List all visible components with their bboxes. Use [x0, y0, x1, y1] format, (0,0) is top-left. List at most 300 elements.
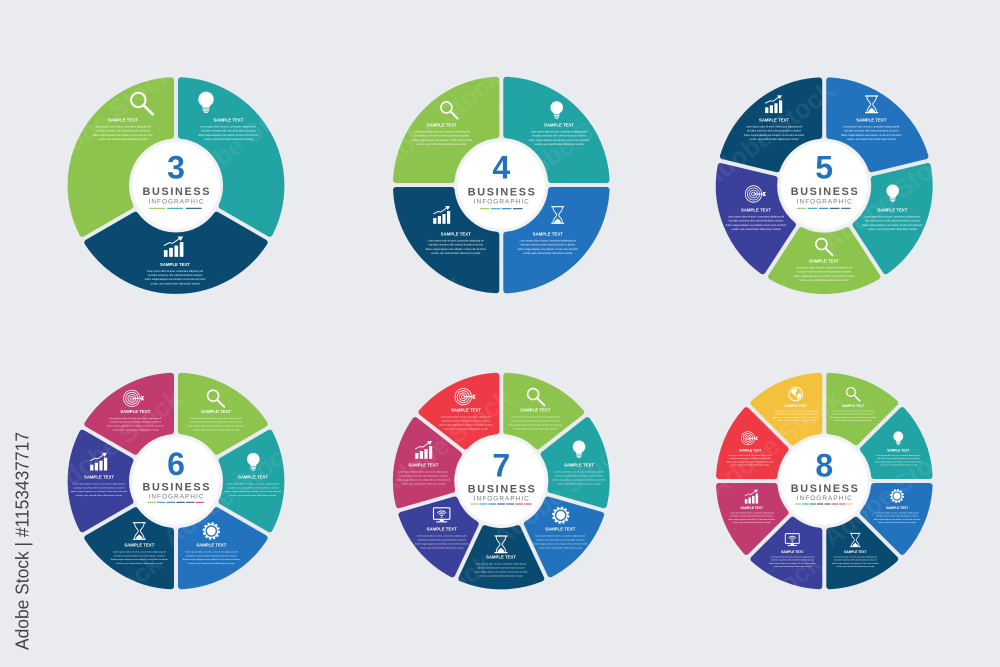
text block: navy: SAMPLE TEXT — [844, 550, 867, 554]
icon: growth chart — [765, 95, 782, 113]
icon: gear — [204, 523, 219, 539]
segment: teal — [222, 433, 282, 529]
text block: green: Lorem ipsum dolor sit amet, consectetur adipiscing elit — [796, 266, 852, 270]
text block: blue — [183, 542, 240, 565]
text block: indigo: veniam, quis nostrud tation ullamcorper suscipit — [731, 228, 781, 231]
text block: navy: dolore magna aliquam erat volutpat. Ut wisi enim ad minim — [744, 134, 804, 137]
wedge: pink — [81, 366, 195, 466]
text block: navy: sed diam nonummy nibh euismod tincidunt ut laoreet — [114, 554, 165, 557]
text block: blue — [874, 506, 921, 524]
hub: 7 — [455, 434, 548, 528]
text block: indigo: SAMPLE TEXT — [427, 526, 457, 532]
icon: light bulb — [550, 101, 563, 119]
text block: navy: SAMPLE TEXT — [486, 554, 516, 560]
text block: green: SAMPLE TEXT — [201, 409, 231, 414]
text block: pink: sed diam nonummy nibh euismod tincidunt ut laoreet — [399, 474, 448, 478]
wedge: teal — [157, 56, 312, 248]
wedge: blue — [512, 482, 607, 579]
colour dashes — [149, 208, 202, 209]
text block: navy: SAMPLE TEXT — [759, 118, 789, 122]
text block: teal: Lorem ipsum dolor sit amet, consectetur adipiscing elit — [864, 216, 921, 218]
segment: teal — [855, 408, 935, 496]
text block: green: dolore magna aliquam erat volutpat. Ut wisi enim ad minim — [830, 416, 877, 419]
text block: teal: veniam, quis nostrud tation ullamcorper suscipit — [868, 228, 917, 231]
text block: teal: sed diam nonummy nibh euismod tincidunt ut laoreet — [555, 474, 604, 478]
text block: pink — [728, 506, 776, 524]
text block: teal: sed diam nonummy nibh euismod tincidunt ut laoreet — [532, 135, 587, 138]
icon: target — [455, 388, 476, 405]
icon: gear — [891, 490, 903, 502]
text block: green: SAMPLE TEXT — [520, 408, 551, 412]
text block: indigo: Lorem ipsum dolor sit amet, consectetur adipiscing elit — [73, 482, 126, 486]
text block: green: sed diam nonummy nibh euismod tincidunt ut laoreet — [832, 413, 875, 416]
icon: globe — [789, 387, 802, 401]
wedge: red — [713, 408, 794, 496]
text block: navy: veniam, quis nostrud tation ullamcorper suscipit — [150, 282, 200, 285]
text block: indigo: Lorem ipsum dolor sit amet, consectetur adipiscing elit — [728, 216, 784, 218]
text block: red: dolore magna aliquam erat volutpat. Ut wisi enim ad minim — [727, 460, 774, 463]
text block: indigo: Lorem ipsum dolor sit amet, consectetur adipiscing elit — [771, 556, 814, 558]
heading: business: BUSINESS — [468, 186, 535, 198]
panel: 7 step circle — [390, 368, 613, 586]
text block: indigo: Lorem ipsum dolor sit amet, consectetur adipiscing elit — [417, 534, 467, 538]
text block: teal: Lorem ipsum dolor sit amet, consectetur adipiscing elit — [200, 126, 257, 128]
segment: blue — [479, 162, 626, 310]
number 4: 4 — [492, 149, 510, 185]
text block: teal: dolore magna aliquam erat volutpat. Ut wisi enim ad minim — [552, 478, 606, 482]
segment: green — [377, 60, 524, 208]
icon: light bulb — [247, 453, 260, 470]
watermark pattern: Adobe Stock — [207, 233, 352, 353]
icon: target — [745, 186, 766, 202]
segment: navy — [810, 512, 898, 592]
icon: hourglass — [133, 523, 146, 539]
text block: blue: veniam, quis nostrud tation ullamcorper suscipit — [539, 546, 582, 550]
wedge: teal — [539, 418, 613, 515]
segment: green — [810, 370, 898, 450]
heading: business: BUSINESS — [142, 482, 210, 494]
text block: indigo: sed diam nonummy nibh euismod tincidunt ut laoreet — [729, 220, 784, 223]
subheading: infographic: INFOGRAPHIC — [797, 495, 852, 502]
wedge: navy — [81, 496, 195, 596]
watermark pattern: Adobe Stock — [695, 75, 840, 195]
text block: green: sed diam nonummy nibh euismod tincidunt ut laoreet — [95, 130, 150, 133]
text block: navy: sed diam nonummy nibh euismod tincidunt ut laoreet — [428, 244, 483, 247]
icon: monitor with wifi — [785, 534, 799, 546]
text block: navy: Lorem ipsum dolor sit amet, consectetur adipiscing elit — [428, 240, 484, 242]
text block: navy: veniam, quis nostrud tation ullamcorper suscipit — [431, 252, 481, 255]
wedge: teal — [222, 433, 281, 529]
watermark pattern: Adobe Stock — [42, 383, 187, 503]
watermark pattern: Adobe Stock — [547, 545, 692, 665]
text block: indigo: veniam, quis nostrud tation ullamcorper suscipit — [773, 565, 812, 568]
text block: teal: veniam, quis nostrud tation ullamcorper suscipit — [204, 138, 253, 141]
subheading: infographic: INFOGRAPHIC — [148, 494, 204, 501]
text block: green: SAMPLE TEXT — [809, 258, 839, 264]
text block: teal: dolore magna aliquam erat volutpat. Ut wisi enim ad minim — [875, 460, 922, 463]
watermark pattern: Adobe Stock — [167, 83, 312, 203]
text block: blue: Lorem ipsum dolor sit amet, consectetur adipiscing elit — [535, 534, 586, 538]
icon: growth chart — [164, 236, 183, 257]
wedge: indigo — [751, 512, 839, 592]
icon: hourglass — [494, 536, 508, 553]
watermark pattern: Adobe Stock — [487, 433, 632, 553]
wedge: blue — [479, 162, 626, 310]
text block: navy: Lorem ipsum dolor sit amet, consectetur adipiscing elit — [113, 550, 166, 554]
text block: yellow: SAMPLE TEXT — [785, 404, 807, 408]
text block: green: sed diam nonummy nibh euismod tincidunt ut laoreet — [190, 421, 242, 424]
text block: blue: dolore magna aliquam erat volutpat. Ut wisi enim ad minim — [874, 518, 921, 521]
text block: teal — [225, 474, 282, 497]
text block: indigo: veniam, quis nostrud tation ullamcorper suscipit — [76, 494, 122, 497]
watermark pattern: Adobe Stock — [22, 548, 167, 667]
text block: blue — [534, 526, 587, 550]
wedge: indigo — [705, 149, 805, 277]
icon: target — [124, 390, 144, 406]
text block: blue: dolore magna aliquam erat volutpat. Ut wisi enim ad minim — [517, 248, 578, 251]
text block: green: veniam, quis nostrud tation ullamcorper suscipit — [98, 138, 148, 141]
segment: navy — [377, 162, 524, 310]
watermark pattern: Adobe Stock — [372, 383, 517, 503]
text block: green: Lorem ipsum dolor sit amet, consectetur adipiscing elit — [831, 410, 875, 412]
wedge: red — [418, 368, 518, 457]
text block: green — [830, 404, 877, 422]
icon: magnifier — [528, 389, 544, 405]
wedge: teal — [479, 60, 626, 208]
text block: teal: sed diam nonummy nibh euismod tincidunt ut laoreet — [201, 130, 256, 133]
text block: teal: veniam, quis nostrud tation ullamcorper suscipit — [557, 482, 601, 486]
text block: green: Lorem ipsum dolor sit amet, consectetur adipiscing elit — [510, 416, 561, 418]
text block: blue: SAMPLE TEXT — [545, 526, 576, 532]
wedge: navy — [810, 512, 898, 592]
segment: teal — [157, 56, 312, 248]
text block: pink: SAMPLE TEXT — [120, 409, 151, 414]
text block: navy — [744, 118, 804, 141]
text block: teal: Lorem ipsum dolor sit amet, consectetur adipiscing elit — [877, 454, 920, 457]
icon: light bulb — [893, 431, 903, 445]
icon: growth chart — [90, 453, 107, 470]
text block: blue: dolore magna aliquam erat volutpat. Ut wisi enim ad minim — [534, 542, 587, 546]
text block: navy — [474, 554, 528, 578]
text block: teal: veniam, quis nostrud tation ullamcorper suscipit — [879, 464, 918, 466]
wedge: navy — [711, 65, 846, 191]
text block: red: SAMPLE TEXT — [739, 448, 761, 452]
text block: red: Lorem ipsum dolor sit amet, consectetur adipiscing elit — [728, 454, 772, 457]
text block: blue: sed diam nonummy nibh euismod tincidunt ut laoreet — [876, 515, 919, 518]
hub: 3 — [130, 139, 222, 232]
text block: green: dolore magna aliquam erat volutpat. Ut wisi enim ad minim — [92, 134, 153, 137]
text block: blue: SAMPLE TEXT — [856, 118, 887, 122]
text block: teal: sed diam nonummy nibh euismod tincidunt ut laoreet — [865, 220, 920, 223]
text block: blue: sed diam nonummy nibh euismod tincidunt ut laoreet — [520, 244, 575, 247]
segment: indigo — [396, 482, 491, 579]
text block: red: SAMPLE TEXT — [451, 408, 481, 412]
wedge: yellow — [751, 370, 839, 450]
text block: pink: dolore magna aliquam erat volutpat. Ut wisi enim ad minim — [397, 478, 450, 482]
segment: blue — [157, 496, 271, 596]
segment: indigo — [751, 512, 839, 592]
text block: blue: veniam, quis nostrud tation ullamcorper suscipit — [878, 521, 916, 524]
text block: blue: sed diam nonummy nibh euismod tincidunt ut laoreet — [536, 538, 585, 542]
hub: 6 — [130, 434, 222, 528]
text block: yellow — [772, 404, 820, 422]
text block: teal: Lorem ipsum dolor sit amet, consectetur adipiscing elit — [554, 470, 604, 474]
icon: magnifier — [847, 388, 860, 401]
text block: navy — [832, 550, 879, 568]
text block: blue: dolore magna aliquam erat volutpat. Ut wisi enim ad minim — [841, 134, 902, 137]
text block: teal: veniam, quis nostrud tation ullamcorper suscipit — [230, 494, 276, 497]
text block: navy: sed diam nonummy nibh euismod tincidunt ut laoreet — [834, 559, 877, 562]
icon: growth chart — [745, 490, 758, 504]
text block: indigo — [726, 208, 786, 231]
icon: hourglass — [850, 533, 860, 547]
segment: blue — [855, 466, 935, 554]
text block: teal: veniam, quis nostrud tation ullamcorper suscipit — [534, 143, 584, 146]
text block: teal: SAMPLE TEXT — [238, 474, 268, 480]
text block: indigo: dolore magna aliquam erat volutpat. Ut wisi enim ad minim — [415, 542, 469, 546]
text block: indigo — [71, 474, 128, 497]
segment: green — [484, 368, 585, 457]
text block: blue: veniam, quis nostrud tation ullamcorper suscipit — [188, 562, 235, 565]
watermark pattern: Adobe Stock — [322, 268, 467, 388]
text block: navy: SAMPLE TEXT — [160, 262, 190, 267]
text block: red — [439, 408, 493, 430]
text block: teal — [862, 208, 923, 231]
heading: business: BUSINESS — [142, 186, 210, 198]
colour dashes — [480, 208, 522, 209]
watermark pattern: Adobe Stock — [702, 383, 847, 503]
text block: teal: dolore magna aliquam erat volutpat. Ut wisi enim ad minim — [225, 490, 282, 493]
text block: navy: dolore magna aliquam erat volutpat. Ut wisi enim ad minim — [425, 248, 486, 251]
text block: blue: veniam, quis nostrud tation ullamcorper suscipit — [523, 252, 573, 255]
text block: blue: Lorem ipsum dolor sit amet, consectetur adipiscing elit — [875, 512, 919, 514]
text block: navy: Lorem ipsum dolor sit amet, consectetur adipiscing elit — [834, 556, 877, 558]
text block: indigo: dolore magna aliquam erat volutpat. Ut wisi enim ad minim — [71, 490, 128, 493]
wedge: indigo — [396, 482, 491, 579]
text block: blue: sed diam nonummy nibh euismod tincidunt ut laoreet — [844, 130, 899, 133]
text block: navy: veniam, quis nostrud tation ullamcorper suscipit — [749, 138, 799, 141]
text block: indigo: SAMPLE TEXT — [741, 208, 771, 212]
wedge: pink — [390, 418, 464, 515]
text block: green: dolore magna aliquam erat volutpat. Ut wisi enim ad minim — [411, 139, 472, 142]
subheading: infographic: INFOGRAPHIC — [148, 198, 204, 206]
text block: blue — [517, 232, 578, 255]
panel: 6 step circle — [71, 366, 282, 596]
hub: 8 — [778, 434, 871, 528]
colour dashes — [147, 502, 204, 503]
colour dashes — [797, 208, 851, 209]
text block: navy: sed diam nonummy nibh euismod tincidunt ut laoreet — [747, 130, 802, 133]
watermark pattern: Adobe Stock — [32, 58, 177, 178]
text block: green — [411, 122, 472, 146]
panel: 4 step circle — [377, 60, 626, 310]
text block: teal — [875, 448, 922, 466]
text block: indigo: dolore magna aliquam erat volutpat. Ut wisi enim ad minim — [726, 224, 786, 227]
text block: teal: Lorem ipsum dolor sit amet, consectetur adipiscing elit — [227, 482, 280, 486]
text block: teal: SAMPLE TEXT — [564, 462, 594, 468]
wedge: green — [810, 370, 898, 450]
text block: pink: veniam, quis nostrud tation ullamcorper suscipit — [402, 482, 445, 486]
segment: pink — [713, 466, 794, 554]
text block: green: veniam, quis nostrud tation ullamcorper suscipit — [193, 428, 239, 431]
icon: hourglass — [865, 96, 878, 113]
text block: pink: dolore magna aliquam erat volutpat. Ut wisi enim ad minim — [728, 518, 776, 521]
text block: blue: Lorem ipsum dolor sit amet, consectetur adipiscing elit — [520, 240, 576, 242]
watermark pattern: Adobe Stock — [817, 138, 962, 258]
text block: green: Lorem ipsum dolor sit amet, consectetur adipiscing elit — [414, 130, 470, 134]
segment: pink — [390, 418, 464, 515]
wedge: indigo — [71, 433, 130, 529]
icon: growth chart — [433, 206, 450, 224]
colour dashes — [471, 504, 532, 505]
segment: teal — [479, 60, 626, 208]
segment: blue — [512, 482, 607, 579]
panel: 3 step circle — [40, 56, 312, 291]
text block: red: veniam, quis nostrud tation ullamcorper suscipit — [731, 464, 769, 466]
text block: red: dolore magna aliquam erat volutpat. Ut wisi enim ad minim — [439, 424, 493, 426]
text block: indigo — [769, 550, 816, 568]
text block: navy: veniam, quis nostrud tation ullamcorper suscipit — [116, 562, 163, 565]
segment: indigo — [71, 433, 130, 529]
watermark pattern: Adobe Stock — [157, 433, 302, 553]
text block: green: dolore magna aliquam erat volutpat. Ut wisi enim ad minim — [794, 275, 854, 278]
number 6: 6 — [167, 446, 185, 482]
segment: navy — [461, 528, 541, 586]
text block: blue: SAMPLE TEXT — [886, 506, 908, 510]
text block: indigo: sed diam nonummy nibh euismod tincidunt ut laoreet — [771, 559, 814, 562]
text block: navy: dolore magna aliquam erat volutpat. Ut wisi enim ad minim — [474, 570, 528, 574]
segment: pink — [81, 366, 195, 466]
text block: red — [727, 448, 774, 466]
text block: red: Lorem ipsum dolor sit amet, consectetur adipiscing elit — [441, 416, 491, 418]
text block: green: SAMPLE TEXT — [108, 118, 138, 122]
wedge: navy — [377, 162, 524, 310]
text block: green: Lorem ipsum dolor sit amet, consectetur adipiscing elit — [95, 126, 151, 128]
text block: indigo: dolore magna aliquam erat volutpat. Ut wisi enim ad minim — [769, 562, 816, 565]
colour dashes — [795, 504, 853, 505]
text block: navy: veniam, quis nostrud tation ullamcorper suscipit — [836, 565, 875, 568]
text block: green — [509, 408, 562, 430]
text block: teal: dolore magna aliquam erat volutpat. Ut wisi enim ad minim — [529, 139, 589, 142]
segment: teal — [844, 149, 943, 277]
segment: green — [40, 56, 195, 248]
panel: 8 step circle — [713, 370, 935, 592]
icon: light bulb — [886, 184, 899, 202]
wedge: blue — [157, 496, 271, 596]
text block: teal — [529, 122, 589, 146]
wedge: green — [771, 230, 877, 291]
text block: blue — [841, 118, 902, 141]
wedge: blue — [855, 466, 935, 554]
segment: red — [713, 408, 794, 496]
heading: business: BUSINESS — [791, 483, 858, 495]
text block: blue: sed diam nonummy nibh euismod tincidunt ut laoreet — [186, 554, 237, 557]
text block: teal — [552, 462, 606, 486]
segment: navy — [81, 496, 195, 596]
text block: navy: SAMPLE TEXT — [124, 542, 155, 548]
segment: navy — [711, 65, 846, 191]
text block: green: dolore magna aliquam erat volutpat. Ut wisi enim ad minim — [509, 424, 562, 426]
text block: pink: Lorem ipsum dolor sit amet, consectetur adipiscing elit — [109, 417, 162, 420]
segment: teal — [539, 418, 613, 515]
text block: yellow: Lorem ipsum dolor sit amet, consectetur adipiscing elit — [774, 410, 818, 412]
text block: navy — [111, 542, 168, 565]
segment: yellow — [751, 370, 839, 450]
text block: indigo: SAMPLE TEXT — [781, 550, 804, 554]
segment: green — [157, 366, 271, 466]
watermark pattern: Adobe Stock — [532, 233, 677, 353]
text block: green: sed diam nonummy nibh euismod tincidunt ut laoreet — [511, 420, 560, 422]
icon: magnifier — [208, 390, 224, 407]
wedge: pink — [713, 466, 794, 554]
text block: blue: SAMPLE TEXT — [533, 232, 563, 236]
text block: navy: sed diam nonummy nibh euismod tincidunt ut laoreet — [148, 274, 203, 277]
heading: business: BUSINESS — [791, 186, 858, 198]
watermark pattern: Adobe Stock — [682, 548, 827, 667]
text block: navy: Lorem ipsum dolor sit amet, consectetur adipiscing elit — [147, 270, 203, 273]
wedge: green — [377, 60, 524, 208]
text block: green: sed diam nonummy nibh euismod tincidunt ut laoreet — [414, 135, 469, 138]
text block: teal: sed diam nonummy nibh euismod tincidunt ut laoreet — [227, 486, 279, 489]
text block: green: SAMPLE TEXT — [842, 404, 864, 408]
text block: pink — [107, 409, 164, 431]
text block: pink: dolore magna aliquam erat volutpat. Ut wisi enim ad minim — [107, 424, 164, 427]
subheading: infographic: INFOGRAPHIC — [474, 495, 529, 502]
text block: indigo: sed diam nonummy nibh euismod tincidunt ut laoreet — [73, 486, 125, 489]
hub: 4 — [455, 138, 548, 232]
text block: pink: sed diam nonummy nibh euismod tincidunt ut laoreet — [110, 421, 161, 424]
text block: navy: Lorem ipsum dolor sit amet, consectetur adipiscing elit — [746, 126, 802, 128]
wedge: green — [40, 56, 195, 248]
text block: navy: dolore magna aliquam erat volutpat. Ut wisi enim ad minim — [832, 562, 879, 565]
text block: yellow: dolore magna aliquam erat volutpat. Ut wisi enim ad minim — [772, 416, 820, 419]
icon: target — [741, 432, 758, 445]
text block: blue: Lorem ipsum dolor sit amet, consectetur adipiscing elit — [185, 550, 238, 554]
text block: navy: SAMPLE TEXT — [441, 232, 471, 236]
wedge: blue — [802, 65, 938, 191]
text block: green: sed diam nonummy nibh euismod tincidunt ut laoreet — [797, 271, 852, 274]
watermark pattern: Adobe Stock — [217, 545, 362, 665]
number 7: 7 — [492, 448, 510, 484]
subheading: infographic: INFOGRAPHIC — [474, 199, 529, 206]
watermark pattern: Adobe Stock — [352, 548, 497, 667]
subheading: infographic: INFOGRAPHIC — [797, 198, 852, 205]
text block: green: veniam, quis nostrud tation ullamcorper suscipit — [799, 279, 849, 282]
wedge: navy — [87, 215, 265, 291]
wedge: green — [157, 366, 271, 466]
panel: 5 step circle — [705, 65, 943, 291]
watermark pattern: Adobe Stock — [652, 273, 797, 393]
wedge: teal — [844, 149, 943, 277]
text block: yellow: sed diam nonummy nibh euismod tincidunt ut laoreet — [775, 413, 817, 416]
text block: teal: dolore magna aliquam erat volutpat. Ut wisi enim ad minim — [862, 224, 923, 227]
text block: green: SAMPLE TEXT — [427, 122, 457, 128]
watermark pattern: Adobe Stock — [857, 545, 1000, 665]
text block: navy: dolore magna aliquam erat volutpat. Ut wisi enim ad minim — [111, 558, 168, 561]
text block: teal: SAMPLE TEXT — [213, 118, 244, 122]
text block: green — [188, 409, 245, 431]
watermark pattern: Adobe Stock — [497, 83, 642, 203]
text block: green — [794, 258, 854, 282]
segment: red — [418, 368, 518, 457]
segment: blue — [802, 65, 938, 191]
text block: green: veniam, quis nostrud tation ullamcorper suscipit — [417, 143, 467, 146]
text block: teal: sed diam nonummy nibh euismod tincidunt ut laoreet — [877, 457, 920, 460]
text block: indigo: veniam, quis nostrud tation ullamcorper suscipit — [420, 546, 464, 550]
icon: monitor with wifi — [434, 508, 450, 522]
wedge: navy — [461, 528, 541, 586]
text block: pink — [397, 462, 450, 486]
